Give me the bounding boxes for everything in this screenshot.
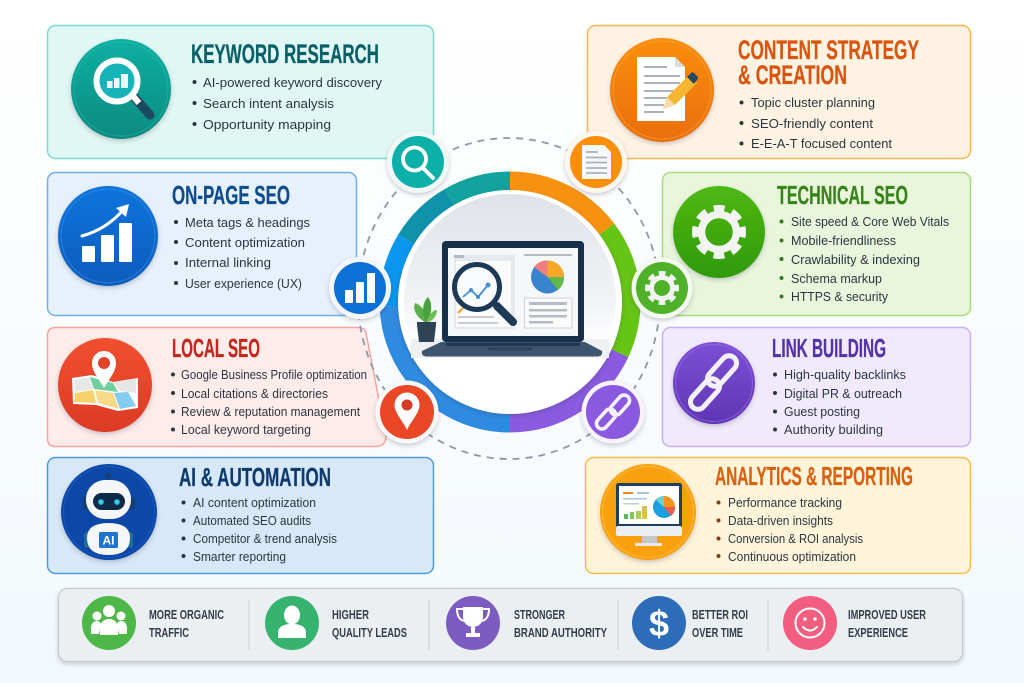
- benefit: stronger brand authority: STRONGER: [514, 607, 565, 622]
- badge: document: [565, 131, 627, 193]
- list: ai and automation: Automated SEO audits: [193, 513, 311, 528]
- icon: rising bars: [58, 186, 158, 286]
- list: local seo: Google Business Profile optimization: [181, 367, 367, 382]
- list: technical seo: [780, 214, 949, 304]
- benefit: improved user experience: IMPROVED USER: [848, 607, 926, 622]
- panel: technical seo: [662, 172, 970, 316]
- list: technical seo: Site speed & Core Web Vitals: [791, 214, 949, 229]
- benefit: better roi: BETTER ROI: [692, 607, 748, 622]
- list: content strategy: E-E-A-T focused content: [751, 136, 892, 151]
- list: technical seo: Crawlability & indexing: [791, 252, 920, 267]
- list: local seo: [171, 367, 367, 437]
- list: on-page seo: [174, 215, 310, 291]
- benefits bar: [58, 588, 962, 662]
- list: analytics and reporting: Data-driven insights: [728, 513, 833, 528]
- heading: content strategy and creation: [738, 35, 919, 90]
- icon: keyword magnifier: [71, 39, 171, 139]
- panel: ai and automation: [48, 458, 434, 574]
- magnifier: [454, 264, 513, 322]
- badge: chart: [329, 257, 391, 319]
- benefit: improved user experience: EXPERIENCE: [848, 625, 908, 640]
- benefit: higher quality leads: [265, 596, 407, 650]
- icon: robot: AI: [102, 534, 114, 548]
- heading: ai and automation: AI & AUTOMATION: [179, 462, 331, 492]
- benefit: improved user experience: [783, 596, 926, 650]
- center circle: [398, 190, 622, 414]
- list: link building: High-quality backlinks: [784, 367, 906, 382]
- list: keyword research: Search intent analysis: [203, 96, 335, 111]
- list: ai and automation: AI content optimization: [193, 495, 316, 510]
- badge: search: [387, 131, 449, 193]
- list: local seo: Review & reputation management: [181, 404, 360, 419]
- panel: keyword research: [48, 26, 434, 158]
- benefit: better roi: $: [649, 603, 669, 644]
- icon: monitor dashboard: [600, 464, 696, 560]
- icon: document and pencil: [610, 38, 714, 142]
- list: keyword research: Opportunity mapping: [203, 117, 331, 132]
- heading: keyword research: KEYWORD RESEARCH: [191, 39, 379, 69]
- list: technical seo: HTTPS & security: [791, 289, 888, 304]
- list: technical seo: Mobile-friendliness: [791, 233, 896, 248]
- list: ai and automation: Smarter reporting: [193, 549, 286, 564]
- benefit: more organic traffic: TRAFFIC: [149, 625, 189, 640]
- list: local seo: Local citations & directories: [181, 386, 328, 401]
- list: keyword research: AI-powered keyword discovery: [203, 75, 382, 90]
- list: technical seo: Schema markup: [791, 271, 882, 286]
- benefit: stronger brand authority: [446, 596, 607, 650]
- dashed orbit: [358, 138, 660, 459]
- heading: content strategy and creation: & CREATION: [738, 60, 847, 90]
- panel: link building: [662, 328, 970, 446]
- list: analytics and reporting: Performance tracking: [728, 495, 842, 510]
- icon: map and pin: [58, 338, 152, 432]
- benefit: higher quality leads: HIGHER: [332, 607, 369, 622]
- heading: technical seo: TECHNICAL SEO: [777, 180, 908, 210]
- heading: content strategy and creation: CONTENT STRATEGY: [738, 35, 919, 65]
- list: link building: [773, 367, 906, 437]
- list: analytics and reporting: [716, 495, 863, 564]
- panel: analytics and reporting: [586, 458, 970, 574]
- benefit: higher quality leads: QUALITY LEADS: [332, 625, 407, 640]
- panel: content strategy: [588, 26, 970, 158]
- panel: on-page seo: [48, 172, 356, 316]
- benefit: better roi: OVER TIME: [692, 625, 743, 640]
- laptop illustration: [411, 241, 609, 358]
- icon: gear: [673, 186, 765, 278]
- list: link building: Guest posting: [784, 404, 860, 419]
- heading: local seo: LOCAL SEO: [172, 333, 260, 363]
- heading: on-page seo: ON-PAGE SEO: [172, 180, 290, 210]
- list: content strategy: SEO-friendly content: [751, 116, 873, 131]
- list: analytics and reporting: Continuous optimization: [728, 549, 856, 564]
- icon: chain link: [673, 342, 755, 424]
- benefit: more organic traffic: MORE ORGANIC: [149, 607, 224, 622]
- benefit: better roi: [632, 596, 748, 650]
- badge: link: [582, 380, 644, 444]
- list: ai and automation: Competitor & trend analysis: [193, 531, 337, 546]
- list: ai and automation: [182, 495, 337, 564]
- list: on-page seo: Meta tags & headings: [185, 215, 310, 230]
- list: link building: Authority building: [784, 422, 883, 437]
- icon: robot: [61, 464, 157, 560]
- list: keyword research: [192, 75, 382, 132]
- benefit: more organic traffic: [82, 596, 224, 650]
- badge: gear: [632, 258, 692, 318]
- badge: location pin: [376, 380, 438, 444]
- list: content strategy: Topic cluster planning: [751, 95, 875, 110]
- list: on-page seo: User experience (UX): [185, 276, 302, 291]
- list: analytics and reporting: Conversion & ROI analysis: [728, 531, 863, 546]
- list: on-page seo: Content optimization: [185, 235, 305, 250]
- list: link building: Digital PR & outreach: [784, 386, 902, 401]
- plant: [414, 297, 437, 342]
- central ring diagram: [389, 181, 631, 423]
- ring segments: [389, 181, 631, 423]
- list: local seo: Local keyword targeting: [181, 422, 311, 437]
- panel: local seo: [48, 328, 386, 446]
- benefit: stronger brand authority: BRAND AUTHORITY: [514, 625, 607, 640]
- list: on-page seo: Internal linking: [185, 255, 271, 270]
- list: content strategy: [740, 95, 892, 151]
- heading: link building: LINK BUILDING: [772, 333, 886, 363]
